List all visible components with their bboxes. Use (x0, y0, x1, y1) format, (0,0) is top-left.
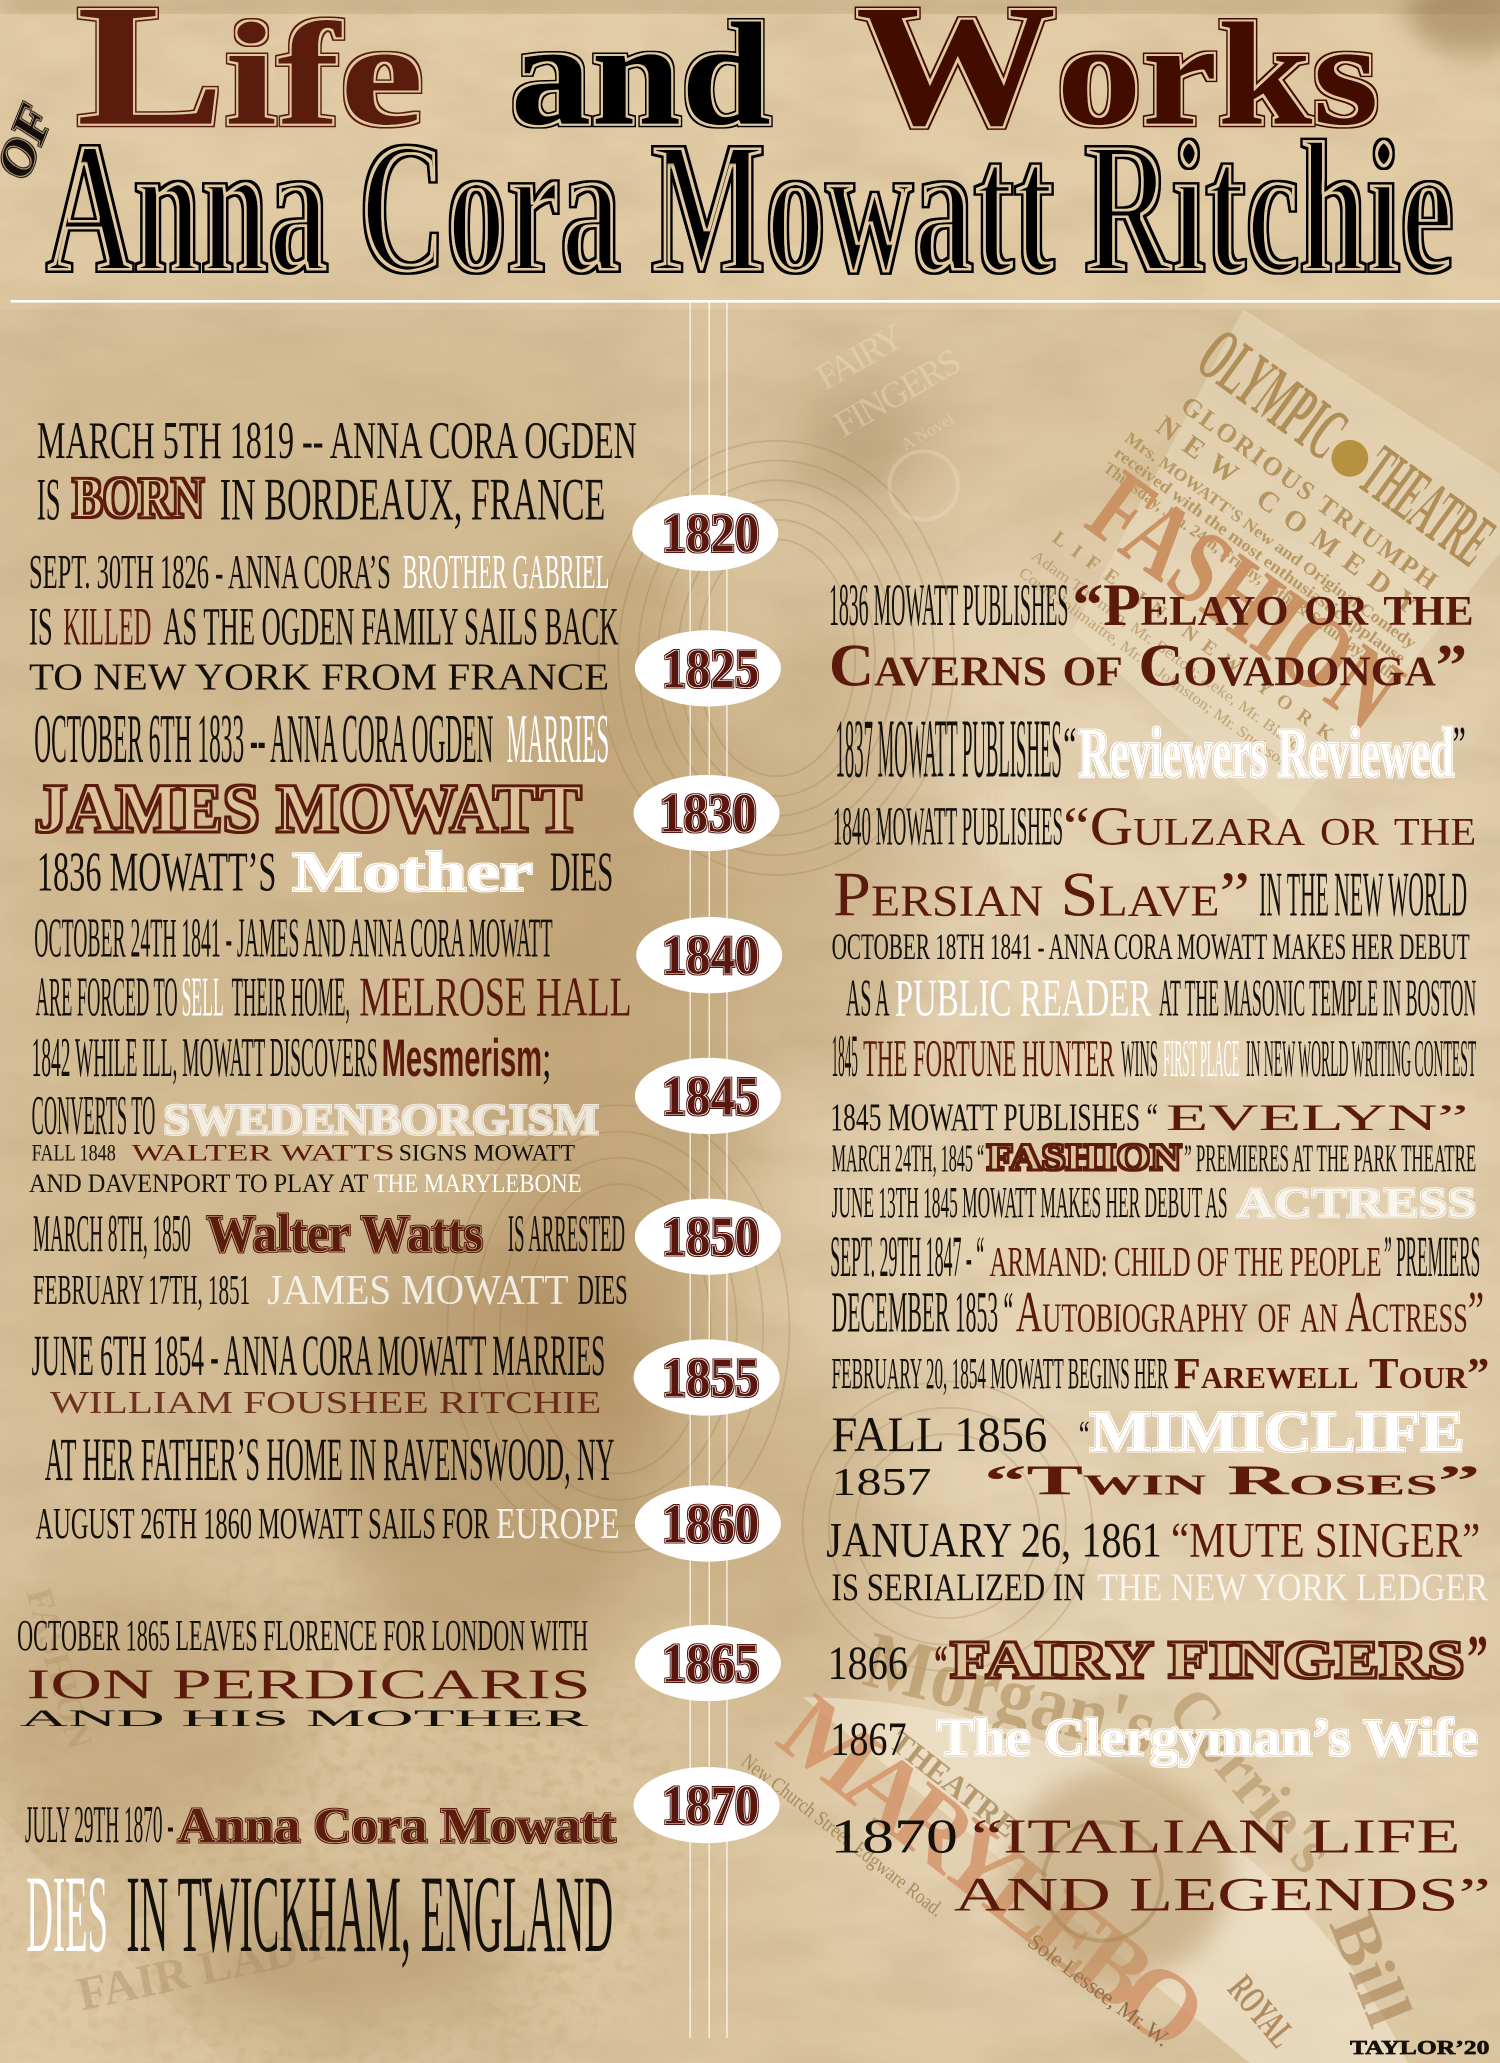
work: Italian Life and Legends: “ITALIAN LIFE (971, 1809, 1460, 1863)
infographic canvas: MARRIES (507, 701, 609, 778)
year marker 1870: 1870 (662, 1775, 759, 1836)
event: birth (37, 412, 637, 534)
work: Fashion premiere (832, 1136, 1476, 1180)
left column timeline events: BROTHER GABRIEL (403, 545, 609, 599)
year marker 1865 (635, 1625, 781, 1701)
header divider (11, 300, 1500, 303)
event: forced to sell Melrose Hall (34, 908, 632, 1029)
right column publications and career (826, 572, 1491, 1921)
left column timeline events: AS THE OGDEN FAMILY SAILS BACK (163, 597, 618, 657)
work: Pelayo: “Pelayo or the (1072, 572, 1474, 639)
event: Walter Watts signs Mowatt (29, 1140, 582, 1198)
aged paper background with faded posters and portrait: New Church Street, Edgware Road. (737, 1749, 948, 1921)
event: Walter Watts signs Mowatt: WALTER WATTS (132, 1140, 395, 1166)
event: James Mowatt dies: FEBRUARY 17TH, 1851 (33, 1267, 250, 1314)
work: Twin Roses: 1857 (832, 1460, 932, 1504)
year marker 1870 (634, 1767, 780, 1843)
event: Walter Watts signs Mowatt: THE MARYLEBONE (374, 1169, 582, 1198)
event: brother Gabriel killed: TO NEW YORK FROM FRANCE (29, 656, 609, 698)
event: leaves Florence for London: AND HIS MOTHER (20, 1706, 589, 1732)
event: death in Twickham (25, 1796, 616, 1975)
infographic canvas: AT HER FATHER’S HOME IN RAVENSWOOD, NY (45, 1426, 614, 1494)
event: mother dies: 1836 MOWATT’S (37, 842, 276, 904)
aged paper background with faded posters and portrait: Thursday, Jan. 24th, Friday, 25th, & Saturday, 26th (1100, 458, 1399, 683)
infographic canvas: OCTOBER 24TH 1841 - JAMES AND ANNA CORA MOWATT (34, 908, 553, 970)
aged paper background with faded posters and portrait: Adam Trueman, Mr. Belton; Zeke, Mr. Bland (1028, 547, 1304, 755)
left column timeline events: OCTOBER 1865 LEAVES FLORENCE FOR LONDON WITH (17, 1610, 588, 1660)
event: mother dies: DIES (550, 842, 613, 904)
event: Walter Watts arrested: MARCH 8TH, 1850 (33, 1205, 191, 1263)
event: Walter Watts signs Mowatt: AND DAVENPORT TO PLAY AT (29, 1169, 368, 1198)
year marker 1860: 1860 (662, 1493, 759, 1554)
work: Mimic Life: FALL 1856 (832, 1406, 1047, 1462)
event: Mesmerism and Swedenborgism (32, 1027, 599, 1147)
year marker 1830 (634, 775, 780, 851)
work: Mute Singer: IS SERIALIZED IN (832, 1565, 1086, 1609)
work: Fashion premiere: FASHION (987, 1137, 1182, 1178)
work: The Clergyman's Wife: 1867 (830, 1714, 907, 1766)
left column timeline events (17, 412, 637, 1975)
aged paper background with faded posters and portrait: A Novel (898, 409, 957, 454)
event: forced to sell Melrose Hall: THEIR HOME, (232, 967, 350, 1029)
infographic canvas: IS ARRESTED (508, 1205, 625, 1263)
year marker 1865: 1865 (662, 1632, 759, 1693)
aged paper background with faded posters and portrait: received with the most enthusiastic applause (1111, 443, 1409, 668)
event: forced to sell Melrose Hall: MELROSE HALL (359, 967, 632, 1029)
event: mother dies: Mother (292, 842, 533, 904)
work: The Clergyman's Wife: The Clergyman’s Wife (937, 1709, 1478, 1767)
event: leaves Florence for London (17, 1610, 591, 1732)
year marker 1825: 1825 (662, 638, 759, 699)
work: Mimic Life (832, 1399, 1464, 1464)
work: Italian Life and Legends: AND LEGENDS” (954, 1869, 1491, 1921)
work: Evelyn: 1845 MOWATT PUBLISHES “ (830, 1095, 1158, 1139)
work: Armand: SEPT. 29TH 1847 - “ (830, 1224, 984, 1289)
work: Pelayo: Caverns of Covadonga ” (829, 632, 1467, 699)
event: birth: IN BORDEAUX, FRANCE (220, 467, 605, 534)
event: birth: MARCH 5TH 1819 -- ANNA CORA OGDEN (37, 412, 637, 470)
year marker 1840: 1840 (662, 925, 759, 986)
event: Walter Watts signs Mowatt: FALL 1848 (32, 1140, 116, 1166)
work: Gulzara: Persian Slave ” (833, 860, 1250, 930)
work: Fairy Fingers: 1866 (828, 1638, 908, 1690)
event: leaves Florence for London: ION PERDICARIS (26, 1662, 591, 1709)
event: Mesmerism and Swedenborgism: ; (542, 1030, 551, 1088)
year marker 1850: 1850 (662, 1206, 759, 1267)
aged paper background with faded posters and portrait: Corrie's (1153, 1673, 1348, 1886)
aged paper background with faded posters and portrait: Bill (1315, 1902, 1426, 2037)
work: Pelayo (829, 572, 1474, 699)
event: brother Gabriel killed (29, 545, 618, 698)
work: Mimic Life: MIMICLIFE (1089, 1399, 1464, 1464)
work: Fairy Fingers: ” (1467, 1623, 1488, 1693)
work: Fairy Fingers: FAIRY FINGERS (950, 1632, 1464, 1690)
event: Walter Watts arrested: Walter Watts (207, 1205, 483, 1263)
year marker 1845 (635, 1058, 781, 1134)
event: marries James Mowatt: JAMES MOWATT (34, 771, 582, 847)
career: debut as actress: ACTRESS (1237, 1180, 1476, 1227)
event: forced to sell Melrose Hall: SELL (182, 967, 224, 1029)
timeline rails (690, 303, 727, 2038)
aged paper background with faded posters and portrait: LIFE IN NEW YORK (1048, 527, 1338, 746)
event: James Mowatt dies: JAMES MOWATT (267, 1267, 569, 1314)
career: debut as public reader (832, 926, 1476, 1028)
career: debut as public reader: PUBLIC READER (895, 970, 1152, 1028)
work: Reviewers Reviewed: ” (1453, 717, 1466, 775)
year marker 1860 (635, 1485, 781, 1562)
work: Gulzara: “Gulzara or the (1063, 796, 1476, 857)
event: Mesmerism and Swedenborgism: Mesmerism (382, 1029, 542, 1088)
year marker 1855: 1855 (662, 1347, 759, 1408)
event: marries William Foushee Ritchie: WILLIAM FOUSHEE RITCHIE (50, 1385, 601, 1420)
work: Mimic Life: “ (1079, 1412, 1089, 1456)
year marker 1830: 1830 (659, 783, 757, 844)
year marker 1845: 1845 (662, 1065, 759, 1126)
work: The Fortune Hunter: 1845 (832, 1023, 858, 1090)
aged paper background with faded posters and portrait: MARYLEBO (759, 1673, 1227, 2063)
work: Reviewers Reviewed: “ (1063, 717, 1076, 775)
work: Evelyn: EVELYN” (1166, 1097, 1468, 1138)
work: Fashion premiere: MARCH 24TH, 1845 “ (832, 1136, 984, 1180)
aged paper background with faded posters and portrait: FASHION (19, 1583, 101, 1754)
career: debut as public reader: AS A (846, 970, 889, 1028)
event: James Mowatt dies: DIES (578, 1267, 628, 1314)
event: death in Twickham: DIES (26, 1853, 108, 1975)
work: The Fortune Hunter: THE FORTUNE HUNTER (863, 1030, 1115, 1088)
year marker 1820: 1820 (662, 502, 759, 563)
event: brother Gabriel killed: IS (29, 597, 53, 657)
work: Autobiography of an Actress: DECEMBER 1853 “ (832, 1279, 1013, 1344)
infographic canvas: IN TWICKHAM, ENGLAND (126, 1853, 613, 1975)
year marker 1840 (636, 917, 782, 993)
year marker 1855 (634, 1339, 780, 1416)
event: brother Gabriel killed: KILLED (63, 597, 151, 657)
aged paper background with faded posters and portrait: NEW COMEDY (1150, 410, 1424, 621)
heading: Life and Works (76, 0, 1379, 162)
event: death in Twickham: JULY 29TH 1870 - (25, 1796, 174, 1854)
event: Mesmerism and Swedenborgism: CONVERTS TO (32, 1085, 155, 1147)
year marker 1825 (635, 630, 781, 707)
work: The Fortune Hunter: FIRST PLACE (1163, 1030, 1239, 1088)
aged paper background with faded posters and portrait: Sole Lessee, Mr. W. (1023, 1929, 1175, 2052)
aged paper background with faded posters and portrait: Count Jolimaitre, Mr. J. Johnston; Mr. Snobson (1016, 564, 1292, 772)
event: birth: IS (37, 467, 61, 534)
aged paper background with faded posters and portrait: Mrs. MOWATT'S New and Original Comedy (1121, 428, 1420, 653)
work: Fairy Fingers (828, 1623, 1488, 1693)
event: brother Gabriel killed: SEPT. 30TH 1826 - ANNA CORA’S (29, 545, 391, 599)
year marker 1820 (632, 495, 778, 571)
event: forced to sell Melrose Hall: ARE FORCED TO (36, 967, 178, 1029)
aged paper background with faded posters and portrait: FAIR LADY (73, 1917, 337, 2021)
work: Mute Singer: JANUARY 26, 1861 (826, 1511, 1162, 1567)
event: marries James Mowatt (34, 701, 609, 847)
work: Fairy Fingers: “ (934, 1634, 947, 1690)
work: Italian Life and Legends (830, 1809, 1491, 1921)
aged paper background with faded posters and portrait: FINGERS (827, 340, 968, 445)
event: marries William Foushee Ritchie (32, 1323, 614, 1494)
work: Italian Life and Legends: 1870 (830, 1809, 958, 1863)
career: farewell tour: Farewell Tour” (1174, 1348, 1489, 1398)
event: sails for Europe: EUROPE (496, 1498, 620, 1548)
event: sails for Europe: AUGUST 26TH 1860 MOWATT SAILS FOR (36, 1498, 490, 1548)
event: Mesmerism and Swedenborgism: 1842 WHILE ILL, MOWATT DISCOVERS (32, 1027, 378, 1089)
event: Mesmerism and Swedenborgism: SWEDENBORGISM (163, 1096, 599, 1144)
work: Gulzara: 1840 MOWATT PUBLISHES (833, 796, 1063, 857)
work: The Fortune Hunter: WINS (1121, 1030, 1158, 1088)
year marker 1850 (635, 1199, 781, 1275)
work: Mute Singer (826, 1511, 1489, 1609)
aged paper background with faded posters and portrait: GLORIOUS TRIUMPH (1176, 390, 1443, 596)
event: Walter Watts signs Mowatt: SIGNS MOWATT (399, 1140, 576, 1166)
work: Twin Roses: “ Twin Roses ” (984, 1458, 1480, 1505)
work: Gulzara (833, 796, 1476, 930)
credit signature: TAYLOR’20 (1350, 2037, 1490, 2059)
aged paper background with faded posters and portrait: THEATRE (883, 1723, 1025, 1845)
event: birth: BORN (72, 465, 204, 530)
infographic canvas: OCTOBER 6TH 1833 -- ANNA CORA OGDEN (34, 701, 493, 778)
event: death in Twickham: Anna Cora Mowatt (178, 1797, 616, 1853)
aged paper background with faded posters and portrait: FAIRY (808, 315, 911, 398)
infographic canvas: JUNE 6TH 1854 - ANNA CORA MOWATT MARRIES (32, 1323, 605, 1388)
aged paper background with faded posters and portrait: Morgan's (856, 1613, 1165, 1773)
